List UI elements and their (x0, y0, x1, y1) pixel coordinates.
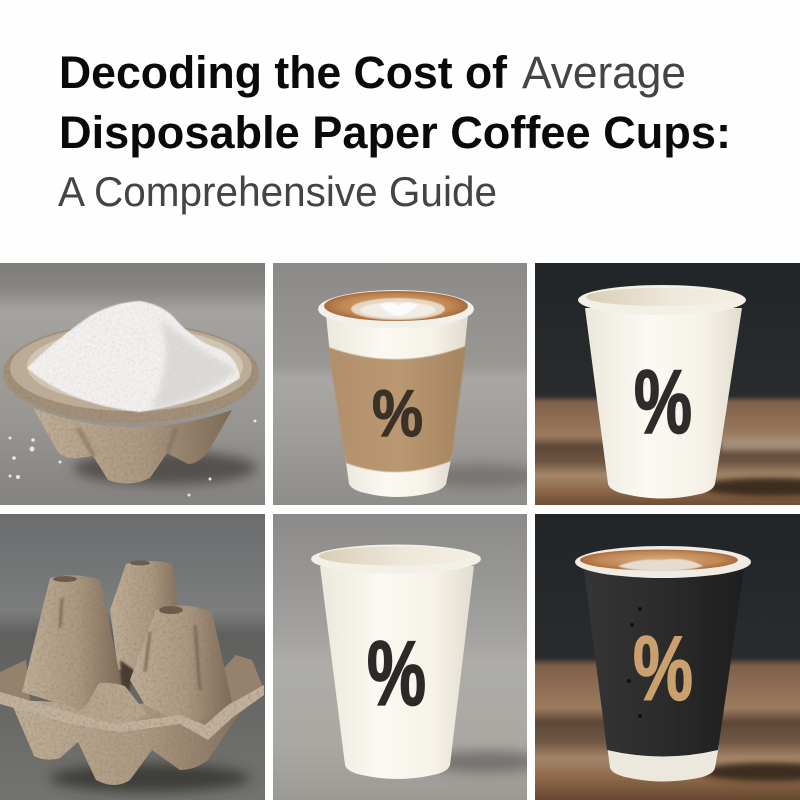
cup base (607, 745, 719, 782)
cup shadow (420, 464, 540, 488)
salt specks (8, 420, 256, 496)
centre small cone (86, 682, 146, 723)
panel: pulp bowl of white sugar (0, 263, 265, 505)
percent mark: % (372, 376, 423, 450)
wood table (535, 396, 800, 505)
panel: plain white cup on concrete (273, 514, 545, 800)
bowl shadow (73, 451, 257, 485)
cup rim (575, 546, 751, 578)
cup base (345, 455, 452, 497)
cup shadow (700, 763, 800, 781)
panel: white cup on wood against dark wall (525, 263, 800, 516)
salt mound (27, 301, 240, 412)
panel: cup with kraft sleeve and latte (273, 263, 540, 505)
sleeve (328, 346, 466, 472)
title line 2: Disposable Paper Coffee Cups: (59, 107, 731, 158)
cup shadow (425, 751, 545, 773)
tray shadow (50, 764, 250, 792)
title line 1: Decoding the Cost of (59, 47, 508, 98)
percent mark: % (634, 353, 692, 453)
percent mark: % (633, 618, 693, 720)
cup upper body (326, 315, 468, 365)
wood table (525, 658, 800, 800)
right cone (130, 605, 232, 728)
cup rim (578, 285, 746, 315)
back cone (110, 561, 184, 670)
title line 1: Average (522, 47, 686, 98)
cone creases (60, 598, 200, 690)
black cup body (584, 570, 744, 756)
bowl rim (3, 323, 259, 423)
bowl base (33, 408, 232, 484)
dark gap between cones (120, 660, 134, 695)
cup interior (319, 546, 446, 566)
front lip (0, 685, 264, 740)
droplets (627, 607, 642, 718)
panel: black cup with gold mark and latte (525, 514, 800, 800)
title (58, 47, 731, 215)
cup rim (318, 290, 474, 328)
panel: pulp egg carton tray (0, 514, 265, 800)
latte art (351, 298, 445, 320)
left cone (22, 575, 122, 710)
percent mark: % (367, 623, 426, 725)
tray feet (13, 700, 240, 785)
cup body (585, 308, 742, 498)
coffee (324, 291, 468, 321)
cone holes (53, 576, 77, 582)
wood highlight (720, 437, 800, 451)
cup shadow (700, 478, 800, 496)
coffee (580, 550, 738, 570)
cup interior (586, 288, 712, 306)
cup rim (311, 544, 481, 574)
tray back wing (0, 655, 262, 704)
subtitle: A Comprehensive Guide (58, 168, 497, 215)
cup body (320, 566, 474, 779)
latte art (618, 559, 703, 571)
